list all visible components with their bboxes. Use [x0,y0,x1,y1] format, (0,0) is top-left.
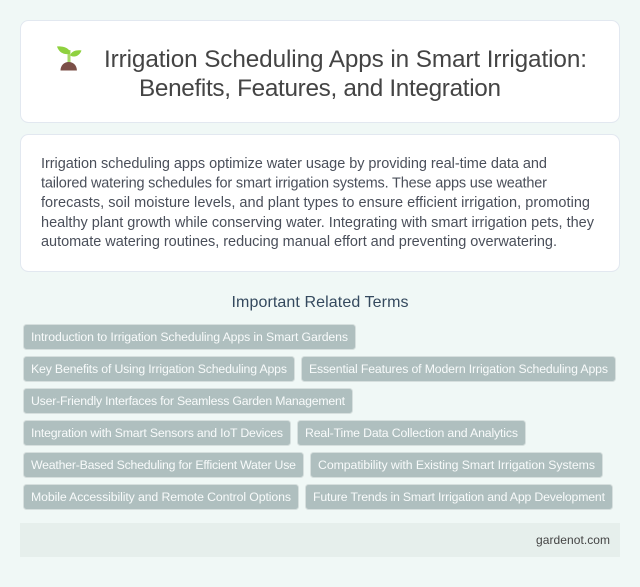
tag [24,324,356,350]
text block: summary [41,156,595,250]
panel: title card [20,20,620,122]
tag: Weather-Based Scheduling for Efficient Water Use [31,458,296,472]
text block: summary: Irrigation scheduling apps optimize water usage by providing real-time data and [41,156,547,172]
tag [310,452,602,478]
text block: summary: healthy plant growth while conserving water. Integrating with smart irrigation pets, they [41,215,595,231]
tag: Compatibility with Existing Smart Irrigation Systems [318,458,595,472]
text block: summary: tailored watering schedules for smart irrigation systems. These apps use weather [41,176,547,192]
tag [24,420,290,446]
tag [24,452,304,478]
text block: summary: forecasts, soil moisture levels, and plant types to ensure efficient irrigation, promoting [41,195,590,211]
tag [302,356,616,382]
footer [20,523,620,557]
tag [24,388,352,414]
panel: summary card [20,134,620,272]
title: Irrigation Scheduling Apps in Smart Irrigation: [104,46,587,73]
title: Benefits, Features, and Integration [139,75,501,102]
footer: source: gardenot.com [536,533,610,547]
tag [306,484,612,510]
tag [24,484,298,510]
tag: Key Benefits of Using Irrigation Scheduling Apps [31,362,287,376]
tag: Future Trends in Smart Irrigation and App Development [313,490,606,504]
title [104,46,587,102]
tag [298,420,526,446]
tag: Mobile Accessibility and Remote Control Options [31,490,291,504]
tag [24,356,294,382]
panel: related terms tags [24,324,616,510]
tag: Essential Features of Modern Irrigation Scheduling Apps [309,362,608,376]
tag: Introduction to Irrigation Scheduling Apps in Smart Gardens [31,330,348,344]
icon: seedling [57,46,82,70]
tag: Real-Time Data Collection and Analytics [305,426,518,440]
tag: User-Friendly Interfaces for Seamless Garden Management [31,394,346,408]
heading: related terms: Important Related Terms [232,294,408,311]
tag: Integration with Smart Sensors and IoT Devices [31,426,283,440]
text block: summary: automate watering routines, reducing manual effort and preventing overwatering. [41,234,557,250]
